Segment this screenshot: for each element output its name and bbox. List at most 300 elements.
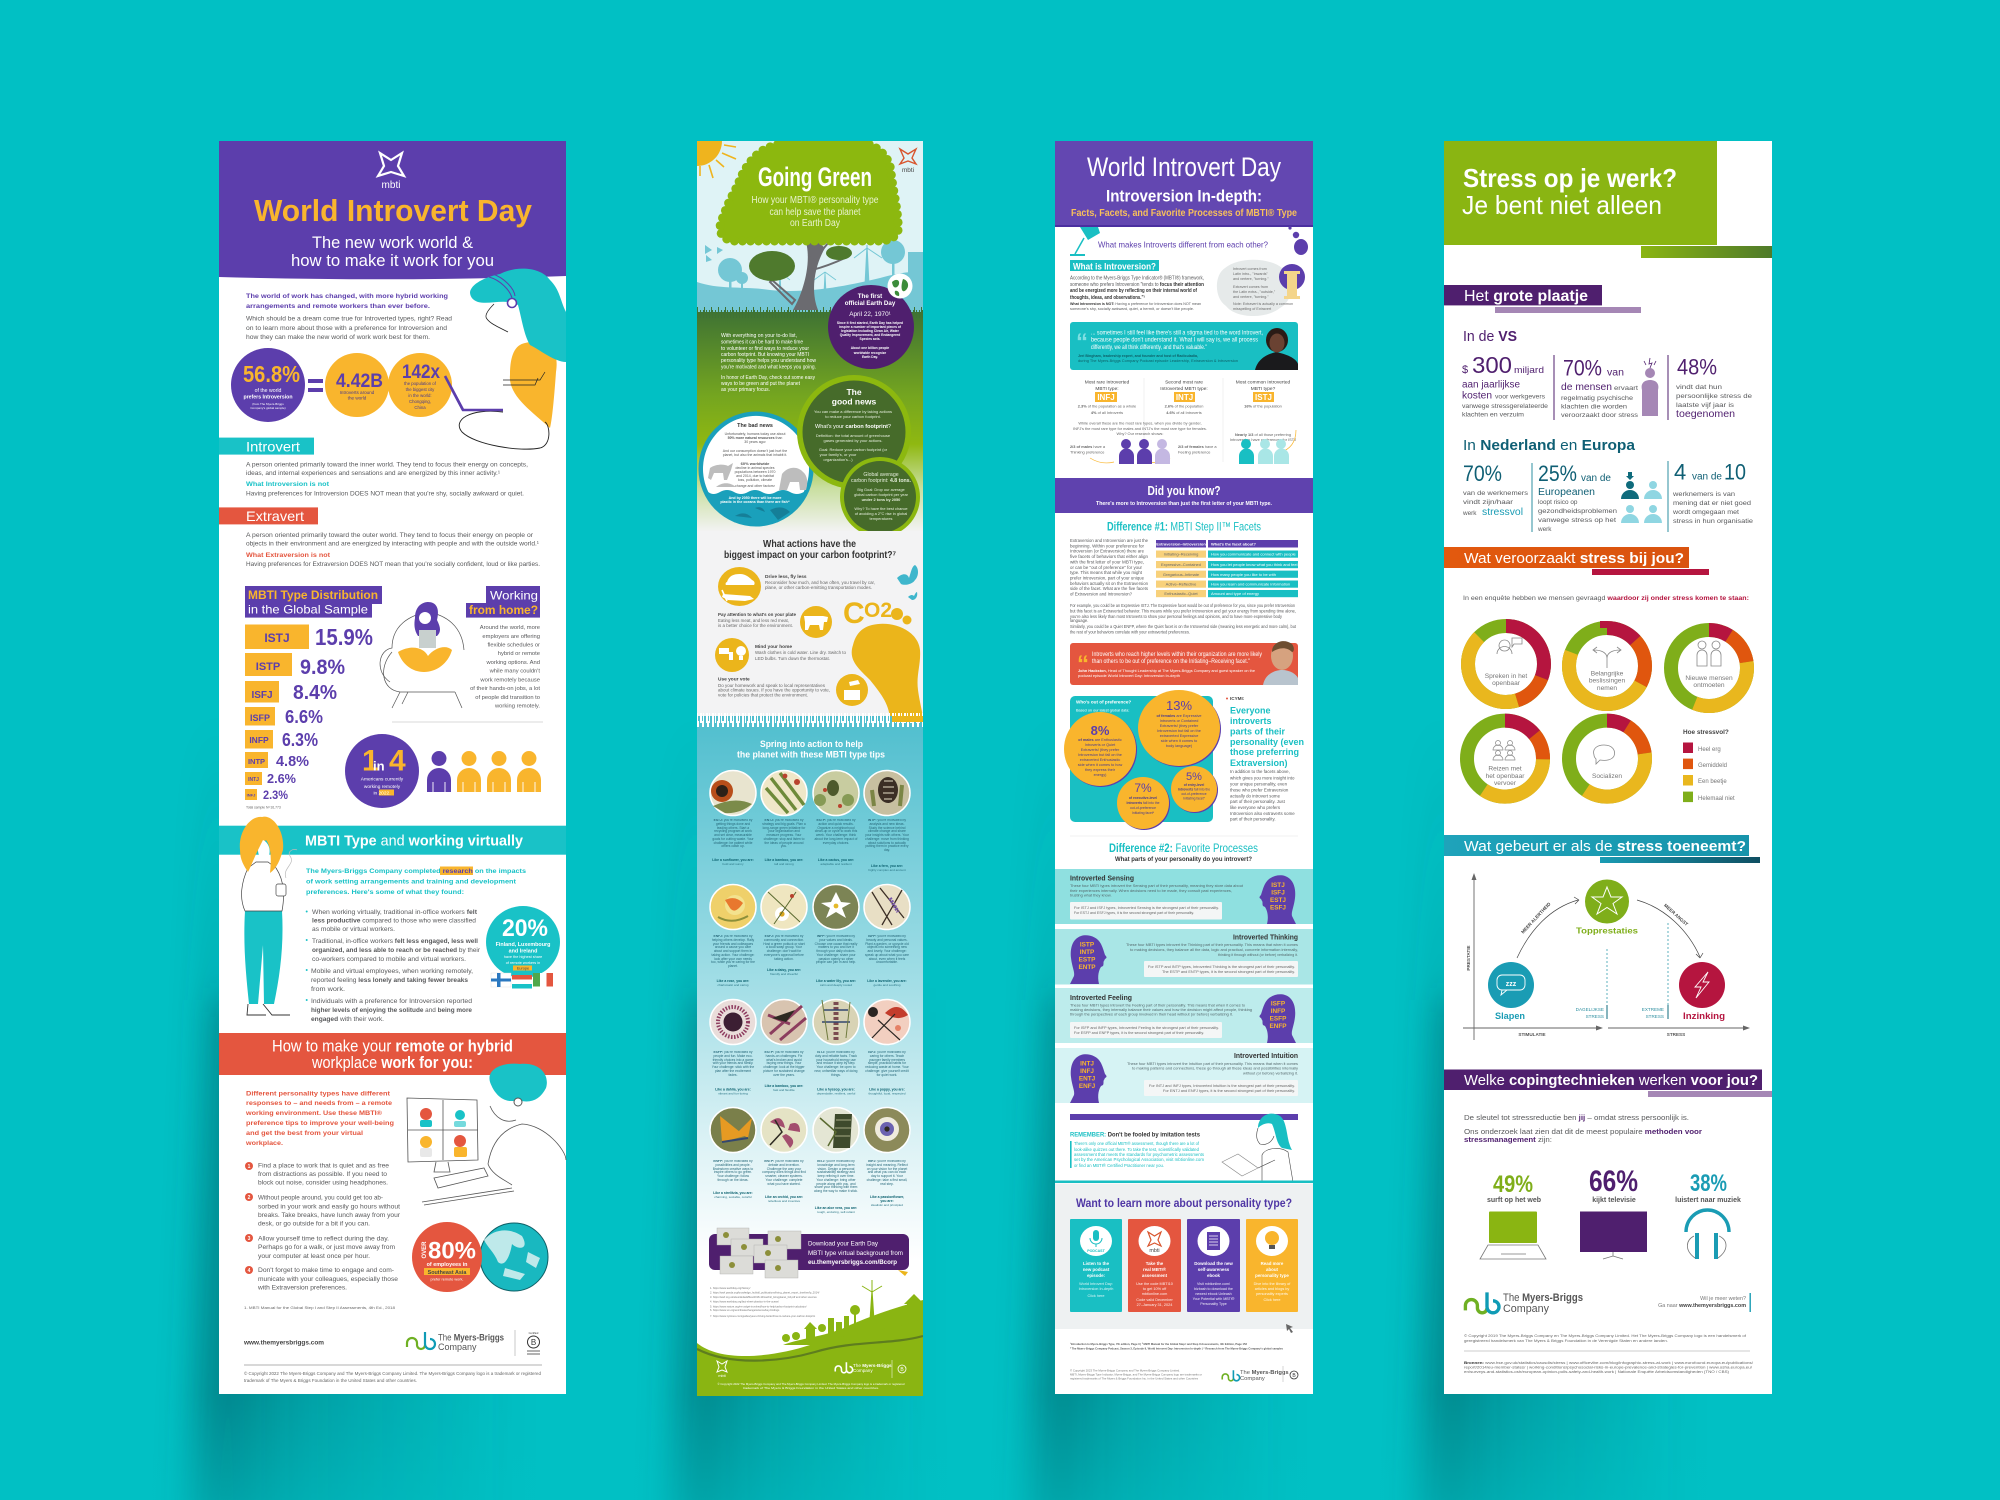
stat: 70 percent: de mensen (1561, 382, 1612, 393)
footnote: 1. MBTI Manual for the Global Step I and Step II Assessments, 4th Ed., 2018 (244, 1305, 395, 1310)
card: download ebook: Your Potential with MBTI® (1193, 1297, 1235, 1301)
stat: 20 percent remote workers: 20% (502, 915, 548, 942)
action: plate: Pay attention to what's on your plate (718, 612, 796, 618)
band: introverted feeling: Introverted Feeling (1070, 993, 1132, 1002)
tip: INTJ aloe (813, 1108, 859, 1214)
stats: rarest introverted types: MBTI type? (1251, 386, 1276, 392)
table: five facets: Amount and type of energy (1211, 591, 1259, 596)
callout: first Earth Day: Earth Day. (862, 355, 878, 359)
stat: 8 percent: Extraverts! (they prefer (1081, 748, 1120, 752)
list: numbered tips: 2 (248, 1195, 251, 1201)
donut chart: belangrijke beslissingen: nemen (1597, 685, 1617, 692)
heading: wat veroorzaakt stress (1444, 547, 1709, 575)
arrow: meer angst: MEER ANGST (1663, 903, 1689, 927)
stats: rarest introverted types: Feeling preference (1178, 450, 1210, 455)
bar chart: type distribution: INTP (248, 757, 265, 766)
tip: INFJ passionflower: idealistic and principled (871, 1203, 903, 1207)
stat: 70 percent (1561, 356, 1638, 419)
tip: ISTJ hyssop (813, 1000, 859, 1096)
heading: Introvert: Introvert (246, 438, 300, 454)
bar chart: type distribution: INTJ (248, 777, 259, 783)
arrow: meer alertheid (1517, 897, 1579, 958)
band: introverted intuition: For INTJ and INFJ types, Introverted Intuition is the strongest part of their personality. (1149, 1083, 1295, 1088)
stat: 5 percent: Introverts fall into the (1178, 788, 1210, 792)
callout: first Earth Day: official Earth Day (845, 300, 896, 307)
stat: 13 percent: body language) (1166, 744, 1193, 748)
icon: head with types: ISTJ (1271, 882, 1285, 889)
logo: The Myers-Briggs Company: Company (438, 1342, 477, 1352)
icon: desk lamp (1070, 227, 1100, 256)
icon: mbti logo: mbti (382, 180, 400, 191)
marker: topprestaties: Topprestaties (1576, 926, 1638, 936)
stat: 70 percent: ervaart (1614, 385, 1638, 392)
header block: Je bent niet alleen (1462, 190, 1662, 220)
stats: rarest introverted types: INFJ (1097, 393, 1115, 402)
tip: ISFP lavender (864, 884, 910, 987)
stats: rarest introverted types: Introverted MBTI type: (1160, 386, 1208, 392)
text: working from home: working options. And (486, 660, 540, 666)
callout: the good news: Definition: the total amount of greenhouse (816, 433, 891, 438)
card: download ebook: bizbash to download the (1194, 1287, 1233, 1291)
card: read more: articles and blogs by (1255, 1287, 1289, 1291)
card: download ebook: Visit mbtionline.com/ (1197, 1282, 1230, 1286)
stat: 4.42B introverts: the world (348, 396, 367, 400)
stat: 48 percent: 48% (1677, 355, 1717, 380)
callout: global average footprint: under 2 tons by 2050 (862, 497, 900, 502)
copyright (244, 1371, 542, 1383)
stat: 8 percent: Introversion but fall on the (1078, 753, 1122, 757)
stat: 13 percent: Extraverts! (they prefer (1160, 724, 1199, 728)
table: five facets: How you learn and communicate information (1211, 582, 1290, 587)
heading: what is introversion: What is Introversion? (1073, 262, 1156, 272)
text: intro on field: to volunteer or find ways to reduce your (721, 346, 809, 352)
callout: global average footprint: carbon footprint: 4.8 tons. (851, 478, 912, 484)
card: download ebook: self-awareness (1198, 1267, 1230, 1272)
header: World Introvert Day (1087, 152, 1281, 182)
stats: rarest introverted types: 2.3% of the population as a whole (1078, 404, 1136, 409)
sources (1464, 1361, 1753, 1374)
text: research lead (306, 866, 526, 896)
text: working from home (470, 625, 540, 710)
stat: 38 percent headphones: 38% (1690, 1170, 1727, 1197)
stat: over 80 percent (412, 1222, 482, 1292)
list: research findings: reported feeling less lonely and taking fewer breaks (311, 978, 469, 984)
tip: ENFP strelitzia (710, 1108, 756, 1199)
question heading: What makes Introverts different from each other? (1098, 239, 1268, 249)
text: facets intro: Introversion (or Extraversion) there are (1070, 549, 1144, 554)
logo: The Myers-Briggs Company (1222, 1366, 1298, 1382)
stat: 49 percent laptop: 49% (1493, 1171, 1533, 1198)
bar chart: type distribution: 2.6% (267, 771, 296, 786)
thought bubble with etymology (1217, 226, 1308, 316)
band: introverted thinking: The ESTP and ENTP types, it is the second strongest part of their personality. (1162, 969, 1295, 974)
stat: 25 percent Europe: loopt risico op (1538, 499, 1578, 506)
icon: head with types: ESTP (1079, 956, 1096, 964)
callout: global average footprint: Why? To have the best chance (854, 506, 908, 511)
band: introverted thinking: These four MBTI types introvert the Thinking part of their personality. This means that when it comes (1126, 942, 1298, 947)
stats: rarest introverted types: 4% of all Introverts (1091, 410, 1123, 415)
text: facet examples: but this facet is an Extraverted behavior. This means while you prefer Introversion and get your energy from spending time alone, (1070, 609, 1296, 614)
tip: ISFJ poppy: Like a poppy, you are: (869, 1088, 905, 1092)
marker: inzinking: Inzinking (1683, 1011, 1725, 1021)
list: numbered tips: desk, or go outside for a bit if you can. (258, 1220, 370, 1227)
legend: hoe stressvol (1683, 729, 1735, 802)
intro text: how they can make the new world of work work best for them. (246, 334, 430, 341)
heading: difference 2: Difference #2: Favorite Processes (1109, 841, 1258, 855)
stat: 1 in 4 Americans: 4 (389, 744, 406, 778)
stat: 142x population: the biggest city (406, 387, 435, 392)
stat: 20 percent remote workers: and Ireland (509, 949, 537, 955)
map: Southeast Asia (480, 1223, 548, 1291)
callout: the bad news: and 2014, due to habitat (736, 474, 774, 478)
table: five facets: What's the facet about? (1211, 541, 1257, 546)
text: research lead: of work setting arrangements and training and development (306, 878, 517, 885)
card: read more: Dive into the library of (1254, 1282, 1291, 1286)
callout: ICYMI: like everyone who prefers (1230, 805, 1281, 810)
list: research findings: Individuals with a preference for Introversion reported (311, 999, 472, 1005)
footer copyright: trademark of The Myers & Briggs Foundation in the United States and other countries. (743, 1386, 879, 1390)
donut chart: socializen (1569, 721, 1645, 797)
callout: the bad news: And by 2050 there will be more (729, 496, 781, 500)
card: podcast: Listen to the (1083, 1261, 1110, 1266)
tip: ESFP dahlia: Like a dahlia, you are: (715, 1088, 751, 1092)
tip: ESFP dahlia (710, 1000, 756, 1096)
text: introversion definition: thoughts, ideas, and observations."¹ (1070, 295, 1145, 301)
stat: 1 in 4 Americans: working remotely (364, 784, 401, 790)
icon: head with types: ISFP (1271, 1000, 1286, 1008)
thought bubble with etymology: Introvert comes from (1233, 267, 1267, 271)
icon: head with types: ESFP (1270, 1016, 1287, 1022)
text: facet examples: Similarly, you could be a Quiet ENFP, where the Quiet facet is on the Introverted side (meaning less energetic and more calm), but (1070, 624, 1297, 629)
subtitle: The new work world & (312, 233, 474, 252)
copyright: © Copyright 2022 The Myers-Briggs Company and The Myers-Briggs Company Limited. The Myers-Briggs Company logo is a trademark or registered (244, 1371, 542, 1376)
tip: ENTJ bamboo: tall and strong (774, 862, 794, 866)
banner: download background: eu.themyersbriggs.com/Bcorp (808, 1259, 897, 1266)
card: read more: Read more (1261, 1261, 1284, 1266)
quote box: Jeri Bingham: because people don't understand it. What I will say is, we all process (1091, 338, 1258, 344)
callout: the good news (797, 375, 911, 489)
bar chart: type distribution: INFP (249, 735, 269, 745)
callout: the bad news: planet, but also the animals that inhabit it. (723, 453, 787, 457)
donut chart: reizen met openbaar vervoer (1467, 721, 1543, 797)
band: introverted feeling: through the perspectives of each group involved in their head without (or before) verbalizing it. (1070, 1012, 1233, 1016)
action: drive less: Drive less, fly less (765, 574, 807, 580)
list: numbered tips: sorbed in your work and easily go hours without (258, 1204, 400, 1210)
copyright: trademark of The Myers & Briggs Foundation in the United States and other countries. (244, 1378, 417, 1383)
text: different personality types: working environment. Use these MBTI® (245, 1109, 382, 1117)
text: facet examples: the rest of your behaviors correlate with your extraverted preferences. (1070, 630, 1190, 635)
icon: head with types: ENFP (1269, 1023, 1287, 1030)
list: numbered tips: municate with your colleagues, especially those (258, 1276, 399, 1283)
list: research findings: organized, and less able to reach or be reached by their (312, 948, 480, 954)
callout: first Earth Day: Species acts. (860, 337, 881, 341)
quote box: Jeri Bingham: during The Myers-Briggs Company Podcast episode Leadership, Extraversion & Introversion (1078, 359, 1238, 363)
callout: the bad news: And our consumption doesn't just hurt the (723, 449, 787, 453)
tip: INTJ aloe: INTJ: you're motivated by knowledge and long-term vision. Design a personal sustainability strategy and keep refining it over time. Your challenge: bring other people along with you, and share your thinking with them along the way to make it stick. (814, 1160, 858, 1193)
copyright (1070, 1368, 1202, 1380)
stat: 5 percent: Initiating facet* (1183, 796, 1206, 800)
text: Introvert definition (246, 462, 528, 498)
list: research findings: Mobile and virtual employees, when working remotely, (311, 969, 473, 975)
heading: spring into action: the planet with these MBTI type tips (737, 750, 885, 760)
panel shadows (192, 720, 1772, 1500)
stat: 4 van de 10: van de (1692, 472, 1722, 483)
stat: 56.8 percent prefers introversion (231, 348, 305, 422)
heading: spring into action: Spring into action to help (760, 739, 863, 749)
stat: 56.8 percent prefers introversion: Company's global sample) (250, 406, 286, 410)
stats: rarest introverted types: INTJ (1176, 393, 1193, 402)
text: facets intro: behaviors actually sit on the Extraversion (1070, 581, 1148, 586)
donut chart: nieuwe mensen ontmoeten (1671, 630, 1747, 706)
band: did you know (1055, 478, 1313, 513)
stats: rarest introverted types: Second most rare (1165, 380, 1203, 386)
tip: ESFJ daisy: Like a daisy, you are: (767, 968, 801, 972)
heading: MBTI type distribution: in the Global Sample (248, 602, 368, 616)
stat: 4 van de 10: 4 (1674, 460, 1686, 485)
stat: 7 percent: 7% (1134, 781, 1152, 795)
icon: mbti logo: mbti (902, 167, 914, 174)
callout: the bad news: 50% more natural resources than (728, 436, 782, 440)
list: research findings: as mobile or virtual workers. (312, 927, 395, 933)
table: five facets: Enthusiastic–Quiet (1164, 591, 1199, 596)
callout: global average footprint: Global average (863, 472, 899, 478)
icon: head with types: INTJ (1080, 1060, 1094, 1068)
card: take the assessment: mbtionline.com (1142, 1292, 1167, 1296)
card: podcast: new podcast (1083, 1267, 1110, 1272)
stress thresholds: STRESS (1646, 1014, 1664, 1019)
band: how to make it work (219, 1033, 566, 1075)
callout: the good news: Goal: Reduce your carbon footprint (or (819, 447, 888, 452)
intro text: Which should be a dream come true for Introverted types, right? Read (246, 316, 452, 322)
text: facets intro: or can be "out of preference" for your (1070, 565, 1142, 570)
intro text: on to learn more about those with a preference for Introversion and (246, 325, 447, 332)
footnotes: 7. https://www.nytimes.com/guides/year-of-living-better/how-to-reduce-your-carbon-footprint (710, 1314, 815, 1318)
stat: 1 in 4 Americans (345, 734, 419, 808)
action: home: Wash clothes in cold water. Line dry. Switch to (755, 650, 847, 655)
title: Going Green (758, 162, 872, 192)
stat: 300 miljard (1462, 352, 1548, 419)
callout: remember (1070, 1132, 1205, 1168)
quote box: Jeri Bingham: “ (1076, 329, 1088, 356)
copyright: MBTI, Myers-Briggs Type Indicator, Myers-Briggs, and The Myers-Briggs Company logo are trademarks or (1070, 1372, 1202, 1376)
text: Introvert definition: What Introversion is not (246, 482, 329, 488)
heading: het grote plaatje: Het grote plaatje (1464, 288, 1588, 305)
list: research findings: from work. (311, 987, 345, 993)
tip: ISTJ hyssop: dependable, resilient, useful (817, 1092, 856, 1096)
callout: ICYMI: introverts (1230, 716, 1272, 726)
stat: 4 van de 10: werknemers is van (1672, 491, 1736, 498)
callout: ICYMI: personality (even (1230, 737, 1304, 747)
stat: 5 percent: out-of-preference (1181, 792, 1207, 796)
legend: hoe stressvol: Hoe stressvol? (1683, 729, 1729, 736)
icon: head with types: ESTJ (1270, 897, 1286, 904)
footer logos: mbti (718, 1373, 726, 1378)
tip: ISFJ poppy (864, 1000, 910, 1096)
callout: the bad news: populations between 1970 (735, 470, 775, 474)
icon: head with types: ENTP (1078, 964, 1096, 971)
action: vote: vote for policies that protect the environment. (718, 693, 808, 698)
donut chart: reizen met openbaar vervoer: Reizen met (1488, 766, 1522, 773)
subtitle (752, 195, 879, 229)
list: research findings (306, 910, 480, 1023)
bar chart: type distribution: 6.3% (282, 730, 318, 750)
stat: 4 van de 10: mening dat er niet goed (1673, 500, 1752, 507)
text: facets intro: of Extraversion and Introversion? (1070, 592, 1132, 597)
text: introversion definition: According to the Myers-Briggs Type Indicator® (MBTI®) framework, (1070, 275, 1204, 282)
footnotes: 6. https://www.un.org/en/climatechange/science/key-findings (710, 1308, 780, 1312)
copyright: © Copyright 2019 The Myers-Briggs Company en The Myers-Briggs Company Limited. Het The Myers-Briggs Company logo is een handelsmerk of (1464, 1333, 1747, 1338)
illustration: woman with tablet (1222, 1114, 1293, 1182)
donut chart: nieuwe mensen ontmoeten: ontmoeten (1693, 682, 1725, 689)
icon: head with types (1070, 935, 1106, 984)
intro text: arrangements and remote workers than ever before. (246, 303, 430, 310)
banner: download background: Download your Earth Day (808, 1240, 879, 1248)
stats: rarest introverted types: INFJ's the most rare type for males and INTJ's the most rare type for females. (1073, 426, 1207, 431)
stat: 4 van de 10: stress in hun organisatie (1673, 518, 1754, 525)
logo: The Myers-Briggs Company: The Myers-Briggs (438, 1332, 504, 1342)
tip: ESTP cactus: Like a cactus, you are: (818, 858, 854, 862)
text: facets intro: with the first letter of your MBTI type, (1070, 560, 1144, 564)
bar chart: type distribution: 15.9% (315, 624, 373, 650)
heading: want to learn more: Want to learn more about personality type? (1076, 1198, 1292, 1210)
text: intro on field: ways to be green and put the planet (721, 381, 801, 387)
heading: wat gebeurt er: Wat gebeurt er als de stress toeneemt? (1464, 838, 1746, 855)
stat: 70 percent: 70% (1563, 356, 1602, 380)
callout: the good news: The (846, 387, 862, 397)
callout: the good news: your family's, or your (820, 452, 857, 457)
callout: ICYMI (1226, 696, 1304, 822)
stat: 25 percent Europe: van de (1581, 473, 1611, 484)
quote box: John Hackston: “ (1077, 651, 1089, 678)
card: take the assessment: Code valid December (1136, 1298, 1173, 1302)
callout: the bad news: 30 years ago² (744, 440, 767, 444)
tip: INTP fern: highly complex and ancient (868, 868, 906, 872)
text: coping intro (1464, 1113, 1702, 1144)
tip: INFJ passionflower (864, 1108, 910, 1207)
heading: what actions: What actions have the (763, 539, 856, 550)
tip: ESFJ daisy: friendly and cheerful (770, 972, 798, 976)
callout: global average footprint: Big Goal: Drop our average (857, 487, 905, 492)
stat: 25 percent Europe: 25% (1538, 461, 1577, 486)
text: working from home: Around the world, more (480, 625, 540, 631)
equals sign (308, 379, 323, 392)
stats: rarest introverted types: Why? Our research shows: (1117, 431, 1163, 436)
action: home (715, 638, 847, 672)
stat: 300 miljard: $ (1462, 364, 1468, 376)
stat: over 80 percent: prefer remote work. (431, 1278, 463, 1282)
contact: Wil je meer weten? (1700, 1296, 1746, 1302)
text: different personality types: and get the best from your virtual (246, 1130, 363, 1137)
bar chart: type distribution: ISTJ (264, 631, 290, 645)
tip: ESFJ daisy (761, 884, 807, 976)
icon: four people (1621, 472, 1662, 523)
callout: the bad news (698, 412, 814, 526)
legend: hoe stressvol: Heel erg (1698, 747, 1721, 753)
heading: what actions (724, 539, 896, 561)
quote box: Jeri Bingham: differently, we all think differently, and that's valuable." (1091, 345, 1207, 351)
stat: 4.42B introverts: 4.42B (336, 371, 383, 392)
tip: ENFJ rose: Like a rose, you are: (717, 979, 749, 983)
table: five facets: How you communicate and connect with people (1211, 552, 1296, 557)
donut chart: nieuwe mensen ontmoeten: Nieuwe mensen (1685, 675, 1733, 682)
text: facet examples: you're also less likely than most Introverts to show your personal feelings and opinions, and to have more expressive body (1070, 614, 1283, 619)
card: download ebook: Personality Type (1200, 1302, 1227, 1306)
tip: ENFJ rose: charismatic and caring (718, 983, 749, 987)
text: Extravert definition: A person oriented primarily toward the outer world. They tend to focus their energy on people or (246, 533, 533, 539)
thought bubble with etymology: misspelling of Extravert (1233, 307, 1271, 311)
band: introverted sensing: These four MBTI types introvert the Sensing part of their personality, meaning they store data about (1070, 883, 1244, 888)
quote box: John Hackston (1070, 641, 1298, 685)
callout: first Earth Day: Quality Improvement, and Endangered (840, 333, 900, 337)
stats: rarest introverted types: Nearly 1/3 of all those preferring (1235, 432, 1291, 437)
illustration: teal skyline (697, 240, 923, 312)
stats: rarest introverted types: 2.6% of the population (1165, 404, 1203, 409)
tip: INTJ aloe: tough, enduring, self-reliant (817, 1210, 855, 1214)
callout: ICYMI: parts of their (1230, 726, 1286, 736)
stat: 70 percent NL: stressvol (1482, 507, 1523, 518)
stat: 142x population: the population of (404, 381, 437, 386)
stat: 142x population: 142x (402, 362, 440, 383)
logo: The Myers-Briggs Company: Certified (529, 1331, 539, 1335)
donut chart: spreken in het openbaar: openbaar (1492, 680, 1521, 687)
card: podcast (1070, 1219, 1122, 1312)
stat: 300 miljard: voor werkgevers (1495, 394, 1545, 400)
tip: ESTP bamboo: fast and flexible (773, 1088, 795, 1092)
stat: 25 percent Europe (1537, 461, 1618, 533)
stat: 300 miljard: vanwege stressgerelateerde (1462, 403, 1548, 410)
thought bubble with etymology: the Latin extra-, "outside," (1233, 290, 1276, 294)
text: introversion definition: What Introversion is NOT: Having a preference for Introversion does NOT mean (1070, 301, 1201, 306)
tip: ESTP cactus: adaptable and resilient (820, 862, 852, 866)
stat: 48 percent: laatste vijf jaar is (1676, 402, 1734, 409)
list: research findings: engaged with their work. (311, 1017, 384, 1023)
callout: ICYMI: Introversion also extraverts some (1230, 811, 1295, 816)
footer wave (697, 1318, 923, 1396)
bar chart: type distribution: 2.3% (263, 788, 288, 802)
stat: 38 percent headphones (1675, 1170, 1741, 1259)
icon: head with types: INFP (1271, 1008, 1286, 1015)
tip: ISTJ hyssop: Like a hyssop, you are: (817, 1088, 855, 1092)
list: numbered tips: 1 (248, 1164, 251, 1170)
stat: 4 van de 10 (1672, 460, 1754, 525)
heading: wat gebeurt er (1444, 835, 1760, 863)
subtitle: on Earth Day (790, 218, 840, 229)
donut chart: belangrijke beslissingen: Belangrijke (1591, 670, 1624, 678)
intro text (246, 293, 452, 341)
stat: 66 percent television (1580, 1165, 1647, 1259)
callout: remember: There's only one official MBTI® assessment, though there are a lot of (1074, 1141, 1200, 1146)
footer logos: B (900, 1367, 904, 1373)
illustration: green village (782, 1280, 924, 1345)
callout: first Earth Day (828, 274, 914, 369)
copyright: registered trademarks of The Myers & Briggs Foundation Inc. in the United States and other Countries (1070, 1376, 1199, 1380)
list: numbered tips: your computer at least once per hour. (258, 1253, 370, 1260)
table: five facets: Extraversion–Introversion (1156, 541, 1206, 546)
text: introversion definition: someone who prefers Introversion "tends to focus their attention (1070, 282, 1204, 288)
card: take the assessment: mbti (1149, 1248, 1160, 1254)
text: working from home: of people did transition to (475, 695, 540, 701)
stat: 56.8 percent prefers introversion: 56.8% (243, 361, 300, 387)
action: vote: about climate issues. If you have the opportunity to vote, (718, 688, 830, 692)
list: research findings: When working virtually, traditional in-office workers felt (312, 910, 477, 916)
donut chart: spreken in het openbaar (1468, 626, 1544, 702)
tip: ENTJ bamboo (761, 770, 807, 866)
text: coping intro: Ons onderzoek laat zien dat dit de meest populaire methoden voor (1464, 1127, 1702, 1136)
text: Extravert definition (246, 533, 540, 568)
heading: Extravert: Extravert (246, 508, 304, 524)
stat: 48 percent: persoonlijke stress de (1676, 393, 1753, 400)
stat: 8 percent: extraverted Enthusiastic (1080, 758, 1120, 762)
